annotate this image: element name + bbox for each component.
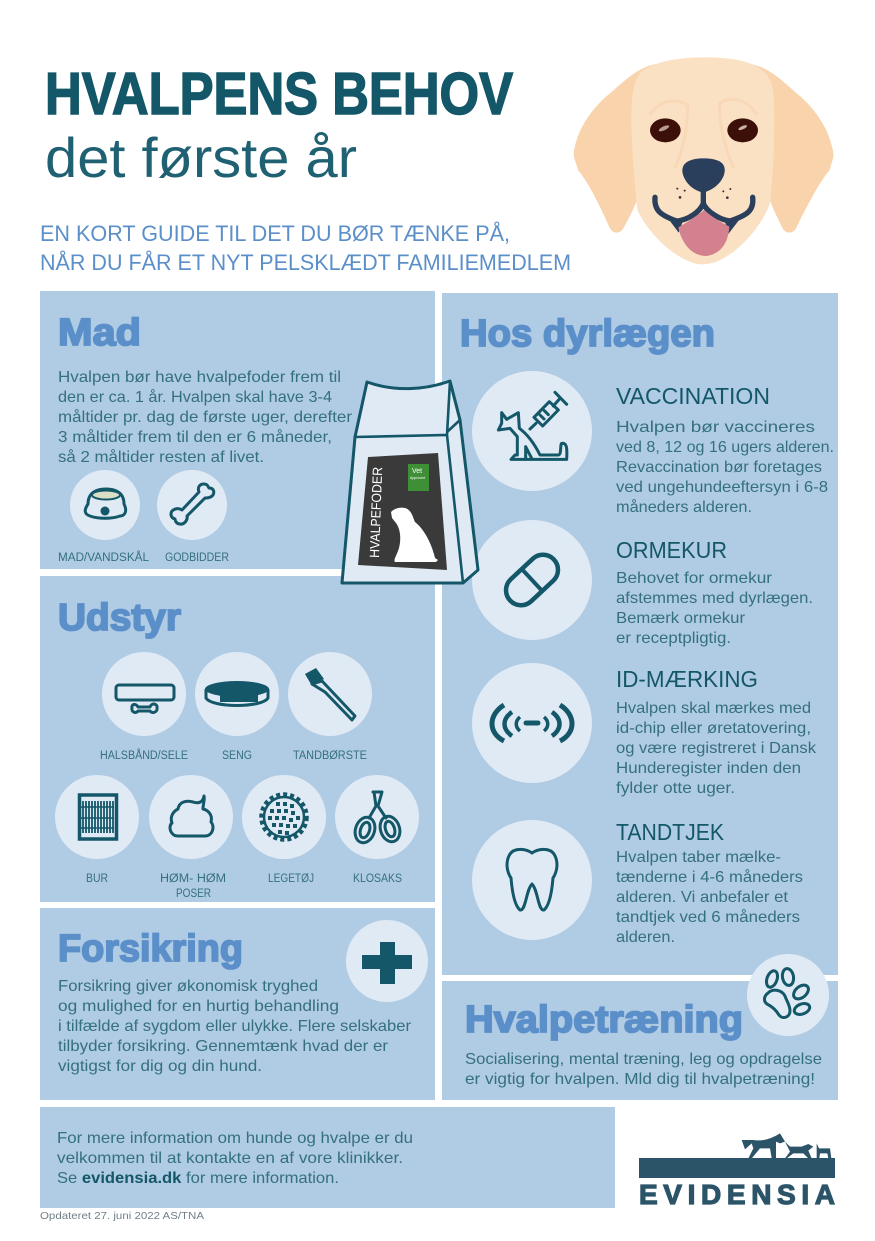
text: Mad body: måltider pr. dag de første uger, derefter bbox=[58, 408, 353, 426]
heading: Hos dyrlægen: Hos dyrlægen bbox=[460, 313, 715, 355]
subtitle: NÅR DU FÅR ET NYT PELSKLÆDT FAMILIEMEDLEM bbox=[40, 250, 571, 275]
title: HVALPENS BEHOV bbox=[45, 61, 513, 127]
text: tandtjek bbox=[616, 819, 803, 946]
icon: legetøj bbox=[242, 775, 326, 859]
icon: høm-høm pose bbox=[149, 775, 233, 859]
heading: Udstyr: Udstyr bbox=[58, 597, 181, 639]
text: Mad body: 3 måltider frem til den er 6 måneder, bbox=[58, 428, 332, 446]
subtitle bbox=[40, 221, 571, 275]
panel: Forsikring bbox=[40, 908, 435, 1100]
panel: footer info bbox=[40, 1107, 615, 1208]
icon: vaccination bbox=[472, 371, 592, 491]
label: seng: SENG bbox=[222, 750, 252, 762]
icon: bur bbox=[55, 775, 139, 859]
text: tandtjek: Hvalpen taber mælke- bbox=[616, 849, 781, 866]
text: updated date: Opdateret 27. juni 2022 AS/TNA bbox=[40, 1210, 204, 1222]
text: id-mærking bbox=[616, 666, 817, 797]
text: ormekur: Behovet for ormekur bbox=[616, 570, 773, 587]
heading: Hvalpetræning: Hvalpetræning bbox=[465, 999, 743, 1041]
text: Mad body bbox=[58, 369, 353, 466]
icon: tandbørste bbox=[288, 652, 372, 736]
text: Forsikring body: Forsikring giver økonomisk tryghed bbox=[58, 978, 318, 995]
text: tandtjek: TANDTJEK bbox=[616, 819, 725, 845]
icon: hvalpefoder bag: Vet bbox=[412, 468, 422, 475]
heading: Mad: Mad bbox=[58, 312, 141, 354]
text: tandtjek: tænderne i 4-6 måneders bbox=[616, 868, 803, 886]
logo: Evidensia bbox=[639, 1133, 835, 1210]
text: vaccination: VACCINATION bbox=[616, 383, 770, 409]
text: Hvalpetræning body: er vigtig for hvalpen. Mld dig til hvalpetræning! bbox=[465, 1071, 815, 1088]
label: bur: BUR bbox=[86, 873, 108, 885]
text: ormekur: er receptpligtig. bbox=[616, 630, 731, 647]
text: vaccination: Revaccination bør foretages bbox=[616, 459, 822, 476]
icon: hvalpefoder bag: Approved bbox=[410, 476, 425, 480]
panel: Hos dyrlægen bbox=[442, 293, 838, 975]
panel: Hvalpetræning bbox=[442, 954, 838, 1100]
logo: Evidensia: EVIDENSIA bbox=[639, 1179, 835, 1210]
text: Hvalpetræning body: Socialisering, mental træning, leg og opdragelse bbox=[465, 1051, 822, 1068]
text: vaccination: ved ungehundeeftersyn i 6-8 bbox=[616, 479, 828, 496]
text: id-mærking: id-chip eller øretatovering, bbox=[616, 720, 811, 737]
icon: plus bbox=[346, 920, 428, 1002]
text: vaccination: ved 8, 12 og 16 ugers alderen. bbox=[616, 439, 834, 456]
label: legetøj: LEGETØJ bbox=[268, 873, 314, 885]
icon: ormekur bbox=[472, 520, 592, 640]
text: ormekur: ORMEKUR bbox=[616, 537, 727, 563]
icon: klosaks bbox=[335, 775, 419, 859]
icon: dog head bbox=[574, 57, 834, 264]
text: vaccination bbox=[616, 383, 834, 516]
text: Mad body: Hvalpen bør have hvalpefoder frem til bbox=[58, 369, 341, 386]
label: klosaks: KLOSAKS bbox=[353, 873, 402, 885]
text: vaccination: Hvalpen bør vaccineres bbox=[616, 419, 815, 436]
label: høm-høm poser bbox=[160, 873, 226, 900]
panel: Udstyr bbox=[40, 576, 435, 902]
icon: bowl bbox=[70, 470, 140, 540]
text: Hvalpetræning body bbox=[465, 1051, 822, 1088]
label: mad/vandskål: MAD/VANDSKÅL bbox=[58, 551, 150, 564]
icon: seng bbox=[195, 652, 279, 736]
icon: tand bbox=[472, 820, 592, 940]
text: tandtjek: tandtjek ved 6 måneders bbox=[616, 908, 800, 926]
panel: Mad bbox=[40, 291, 435, 569]
heading: Forsikring: Forsikring bbox=[58, 928, 243, 970]
text: id-mærking: Hunderegister inden den bbox=[616, 760, 801, 777]
text: Forsikring body: tilbyder forsikring. Gennemtænk hvad der er bbox=[58, 1038, 389, 1055]
icon: halsbånd bbox=[102, 652, 186, 736]
text: id-mærking: fylder otte uger. bbox=[616, 780, 735, 797]
text: ormekur: afstemmes med dyrlægen. bbox=[616, 590, 813, 607]
title bbox=[45, 61, 513, 189]
text: footer info: velkommen til at kontakte en af vore klinikker. bbox=[57, 1150, 403, 1167]
text: ormekur: Bemærk ormekur bbox=[616, 610, 746, 627]
text: footer info bbox=[57, 1130, 413, 1187]
label: godbidder: GODBIDDER bbox=[165, 552, 229, 564]
text: id-mærking: ID-MÆRKING bbox=[616, 666, 758, 692]
label: høm-høm poser: HØM- HØM bbox=[160, 873, 226, 885]
text: Mad body: den er ca. 1 år. Hvalpen skal have 3-4 bbox=[58, 388, 332, 406]
text: Forsikring body: i tilfælde af sygdom eller ulykke. Flere selskaber bbox=[58, 1018, 412, 1035]
icon: hvalpefoder bag: HVALPEFODER bbox=[367, 466, 385, 558]
text: ormekur bbox=[616, 537, 813, 647]
icon: pote bbox=[747, 954, 829, 1036]
text: Forsikring body bbox=[58, 978, 412, 1075]
icon: hvalpefoder bag bbox=[342, 381, 478, 583]
text: Forsikring body: vigtigst for dig og din hund. bbox=[58, 1058, 262, 1075]
text: vaccination: måneders alderen. bbox=[616, 498, 752, 516]
label: halsbånd/sele: HALSBÅND/SELE bbox=[100, 749, 188, 762]
icon: bone bbox=[157, 470, 227, 540]
text: id-mærking: Hvalpen skal mærkes med bbox=[616, 700, 811, 717]
label: tandbørste: TANDBØRSTE bbox=[293, 750, 367, 762]
subtitle: EN KORT GUIDE TIL DET DU BØR TÆNKE PÅ, bbox=[40, 221, 510, 246]
text: footer info: Se evidensia.dk for mere information. bbox=[57, 1170, 339, 1187]
label: høm-høm poser: POSER bbox=[176, 888, 211, 900]
text: Forsikring body: og mulighed for en hurtig behandling bbox=[58, 998, 339, 1015]
title: det første år bbox=[45, 126, 357, 189]
text: id-mærking: og være registreret i Dansk bbox=[616, 740, 817, 757]
text: Mad body: så 2 måltider resten af livet. bbox=[58, 448, 264, 466]
icon: id-mærking bbox=[472, 663, 592, 783]
text: tandtjek: alderen. bbox=[616, 929, 675, 946]
text: footer info: For mere information om hunde og hvalpe er du bbox=[57, 1130, 413, 1147]
text: tandtjek: alderen. Vi anbefaler et bbox=[616, 889, 789, 906]
